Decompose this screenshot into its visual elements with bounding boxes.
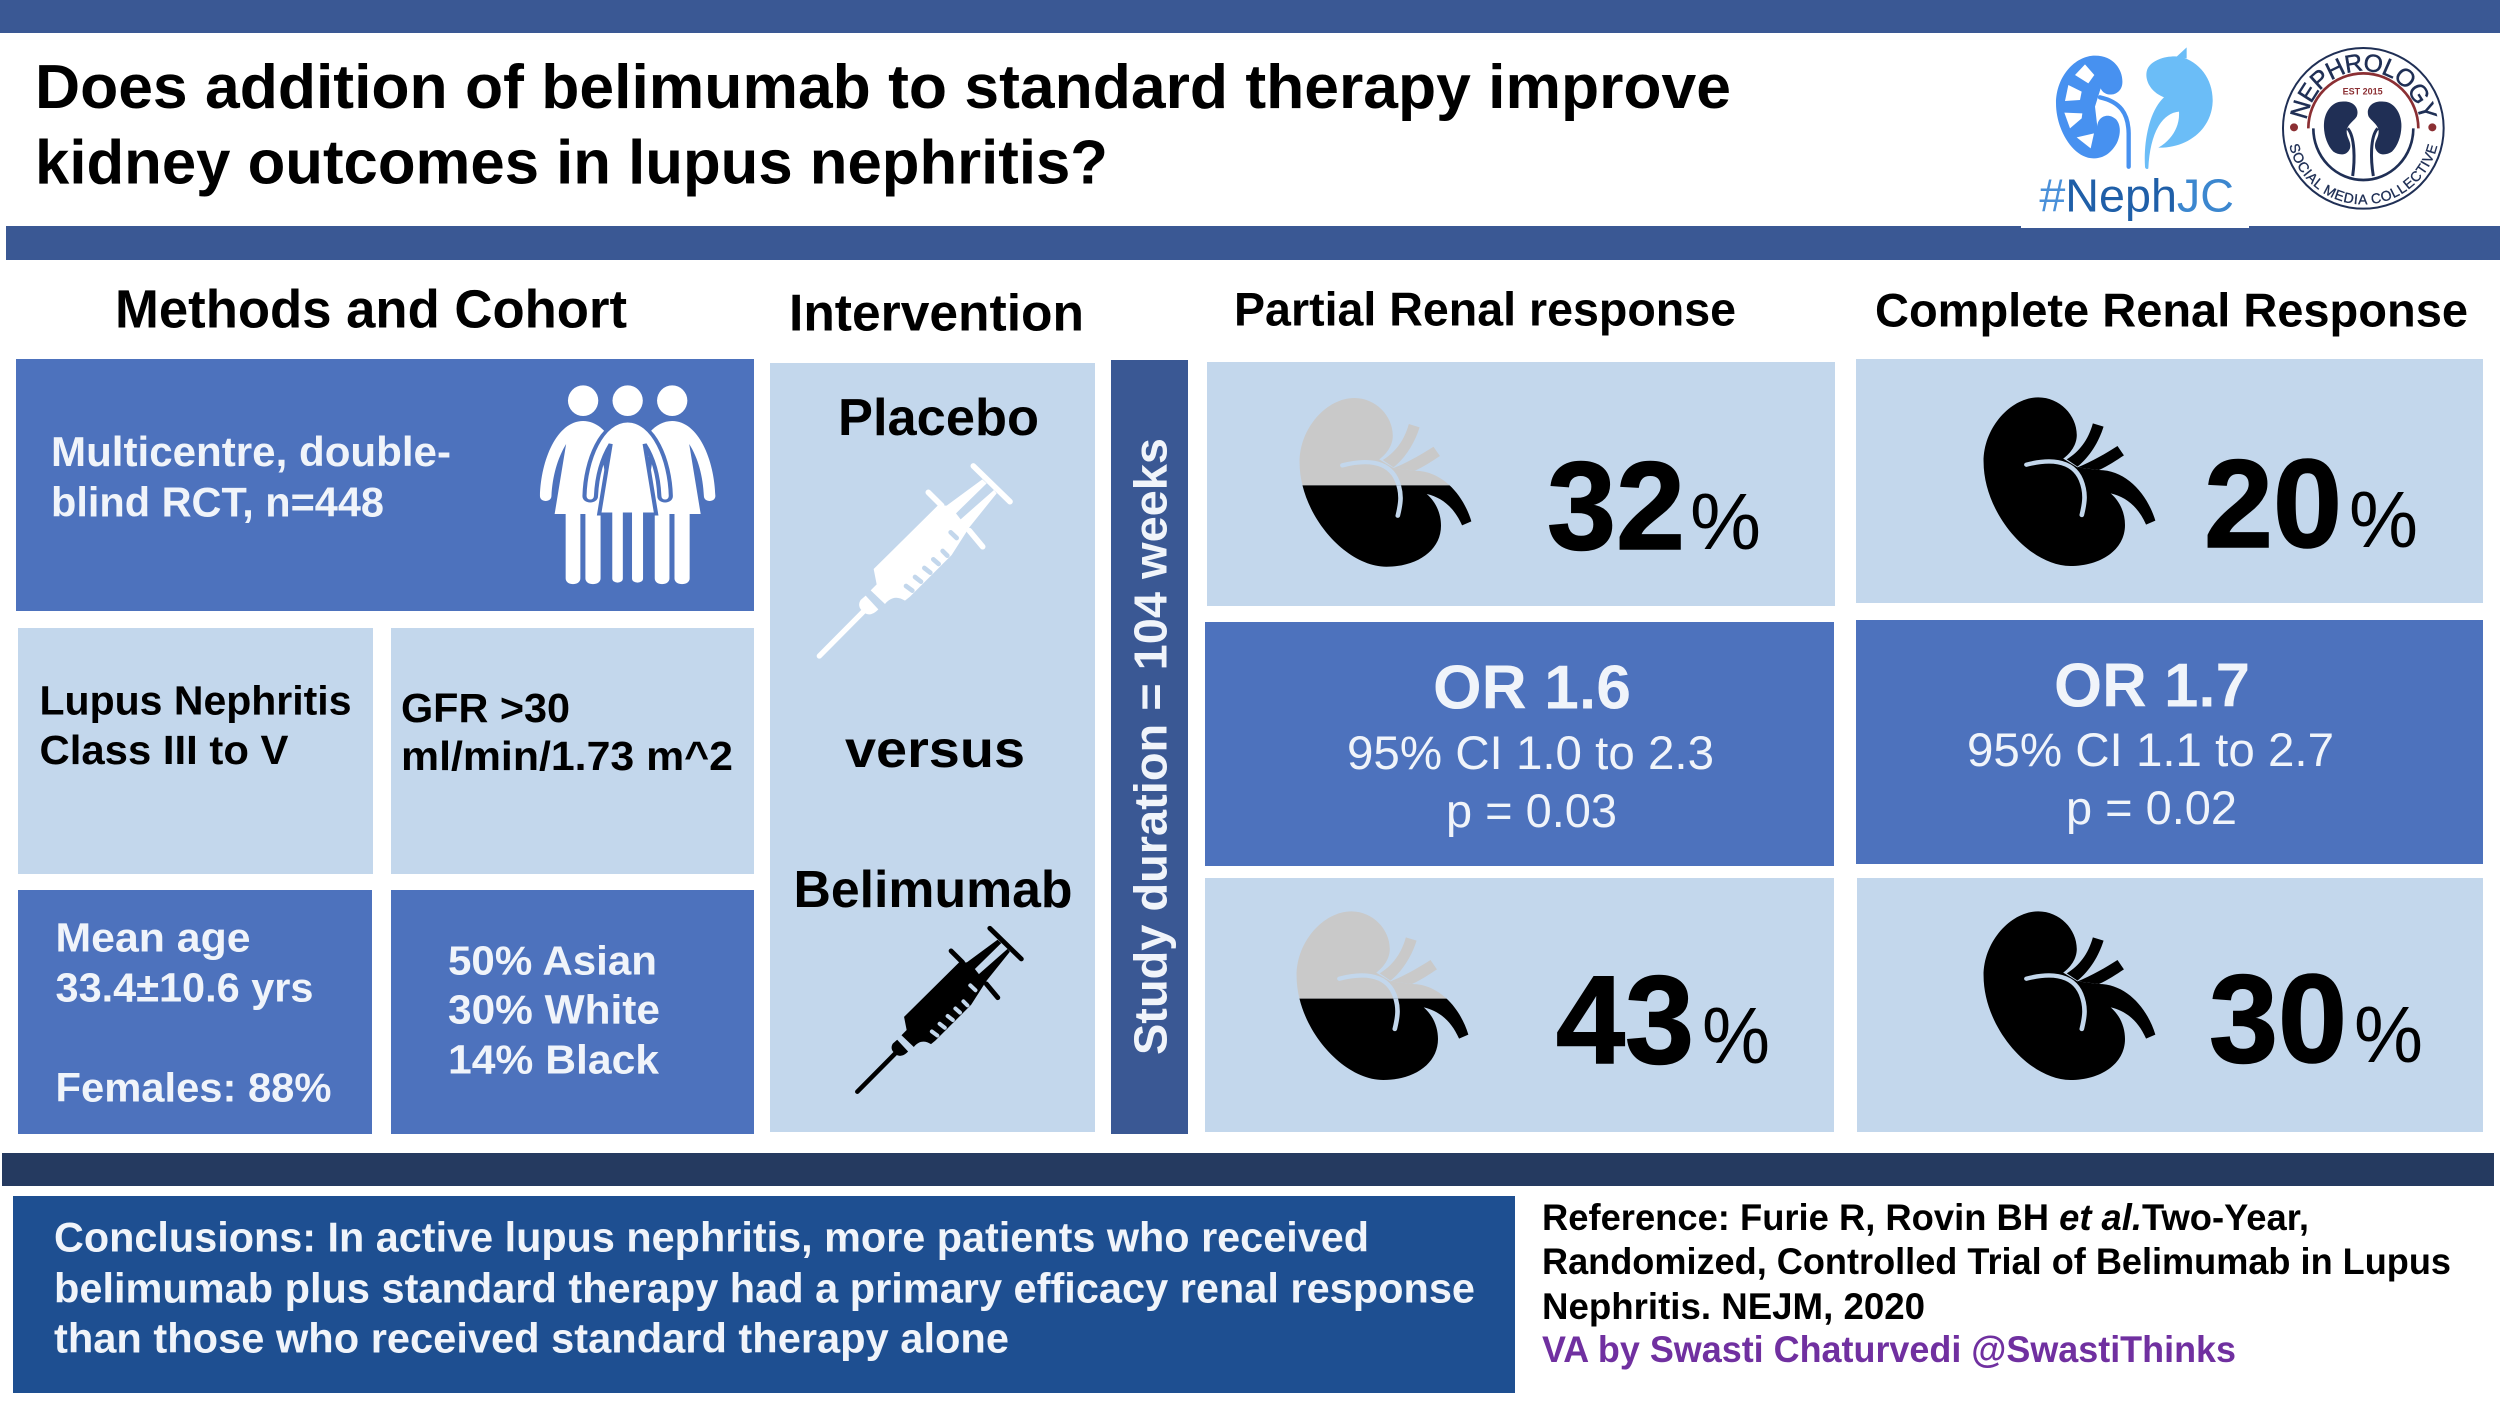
heading: Methods and Cohort: Methods and Cohort: [115, 280, 627, 340]
panel: GFR criterion: [391, 628, 754, 874]
panel: complete response placebo 20%: [1856, 359, 2483, 603]
panel: study duration: [1111, 360, 1188, 1134]
panel: complete response odds ratio: [1856, 620, 2483, 864]
logo: Nephrology Social Media Collective seal: [2282, 47, 2445, 210]
value: 30%: 30: [2209, 950, 2347, 1089]
logo: Nephrology Social Media Collective seal: NEPHROLOGY: [2290, 54, 2438, 119]
panel: complete response odds ratio: OR 1.7: [2054, 652, 2250, 720]
icon: kidney: [1984, 397, 2155, 566]
label: versus: versus: [845, 721, 1025, 779]
panel: ethnicity: 30% White: [448, 986, 660, 1032]
panel: ethnicity: 50% Asian: [448, 938, 657, 984]
logo: Nephrology Social Media Collective seal: EST 2015: [2343, 87, 2383, 97]
panel: lupus nephritis class: Lupus Nephritis: [40, 678, 352, 724]
panel: conclusions: [13, 1196, 1515, 1393]
panel: complete response odds ratio: p = 0.02: [2066, 781, 2237, 834]
icon: half-filled kidney: [1300, 398, 1471, 567]
footer divider bar: [2, 1153, 2494, 1186]
value: 20%: 20: [2204, 435, 2342, 574]
panel: study design: [16, 359, 754, 611]
panel: study duration: Study duration = 104 weeks: [1124, 438, 1176, 1055]
value: 32%: %: [1690, 477, 1761, 566]
panel: conclusions: than those who received standard therapy alone: [54, 1314, 1009, 1362]
panel: age and sex: Females: 88%: [56, 1064, 332, 1110]
panel: lupus nephritis class: [18, 628, 373, 874]
text: study design: [51, 428, 451, 526]
panel: age and sex: Mean age: [56, 914, 250, 960]
title: [35, 53, 1731, 198]
panel: lupus nephritis class: Class III to V: [40, 727, 289, 773]
top banner bar: [0, 0, 2500, 33]
panel: partial response odds ratio: [1205, 622, 1834, 866]
value: 43%: %: [1702, 991, 1770, 1080]
icon: white syringe: [819, 466, 1010, 656]
panel: conclusions: belimumab plus standard therapy had a primary efficacy renal response: [54, 1264, 1475, 1312]
label: Belimumab: Belimumab: [794, 861, 1072, 919]
heading: Partial Renal response: Partial Renal response: [1234, 282, 1736, 336]
logo: NephJC: [2021, 47, 2249, 228]
panel: partial response belimumab 43%: [1205, 878, 1834, 1132]
value: 30%: [2209, 950, 2423, 1089]
text: reference and credit: VA by Swasti Chaturvedi @SwastiThinks: [1542, 1329, 2236, 1370]
value: 32%: 32: [1547, 437, 1685, 576]
panel: partial response odds ratio: 95% CI 1.0 to 2.3: [1347, 726, 1714, 779]
panel: GFR criterion: GFR >30: [401, 685, 570, 731]
heading: Intervention: Intervention: [789, 284, 1084, 342]
value: 30%: %: [2354, 990, 2423, 1079]
panel: conclusions: Conclusions: In active lupus nephritis, more patients who received: [54, 1214, 1369, 1260]
text: study design: blind RCT, n=448: [51, 478, 384, 526]
text: reference and credit: [1542, 1197, 2451, 1370]
header divider bar: [6, 226, 2500, 260]
panel: complete response odds ratio: 95% CI 1.1 to 2.7: [1967, 723, 2334, 776]
panel: ethnicity: [391, 890, 754, 1134]
value: 20%: %: [2349, 475, 2418, 564]
panel: age and sex: [18, 890, 372, 1134]
panel: partial response odds ratio: OR 1.6: [1433, 654, 1631, 722]
panel: intervention: [770, 363, 1095, 1132]
panel: GFR criterion: ml/min/1.73 m^2: [401, 733, 733, 779]
title: kidney outcomes in lupus nephritis?: [35, 128, 1108, 198]
heading: Complete Renal Response: Complete Renal Response: [1875, 284, 2468, 336]
text: study design: Multicentre, double-: [51, 428, 451, 475]
panel: age and sex: 33.4±10.6 yrs: [56, 964, 314, 1010]
panel: complete response belimumab 30%: [1857, 878, 2483, 1132]
panel: partial response odds ratio: p = 0.03: [1446, 784, 1617, 837]
text: reference and credit: Nephritis. NEJM, 2020: [1542, 1286, 1925, 1327]
label: Placebo: Placebo: [838, 389, 1039, 447]
logo: NephJC: #NephJC: [2039, 170, 2234, 222]
value: 43%: 43: [1556, 951, 1694, 1090]
value: 32%: [1547, 437, 1761, 576]
panel: partial response placebo 32%: [1207, 362, 1835, 606]
icon: three women: [540, 385, 715, 584]
panel: ethnicity: 14% Black: [448, 1036, 659, 1082]
value: 20%: [2204, 435, 2418, 574]
icon: half-filled kidney: [1297, 911, 1468, 1080]
icon: kidney: [1984, 911, 2155, 1080]
text: reference and credit: Reference: Furie R, Rovin BH et al.Two-Year,: [1542, 1197, 2309, 1238]
logo: Nephrology Social Media Collective seal: SOCIAL MEDIA COLLECTIVE: [2290, 144, 2438, 204]
value: 43%: [1556, 951, 1770, 1090]
title: Does addition of belimumab to standard therapy improve: [35, 53, 1731, 122]
text: reference and credit: Randomized, Controlled Trial of Belimumab in Lupus: [1542, 1241, 2451, 1282]
icon: black syringe: [857, 928, 1021, 1092]
